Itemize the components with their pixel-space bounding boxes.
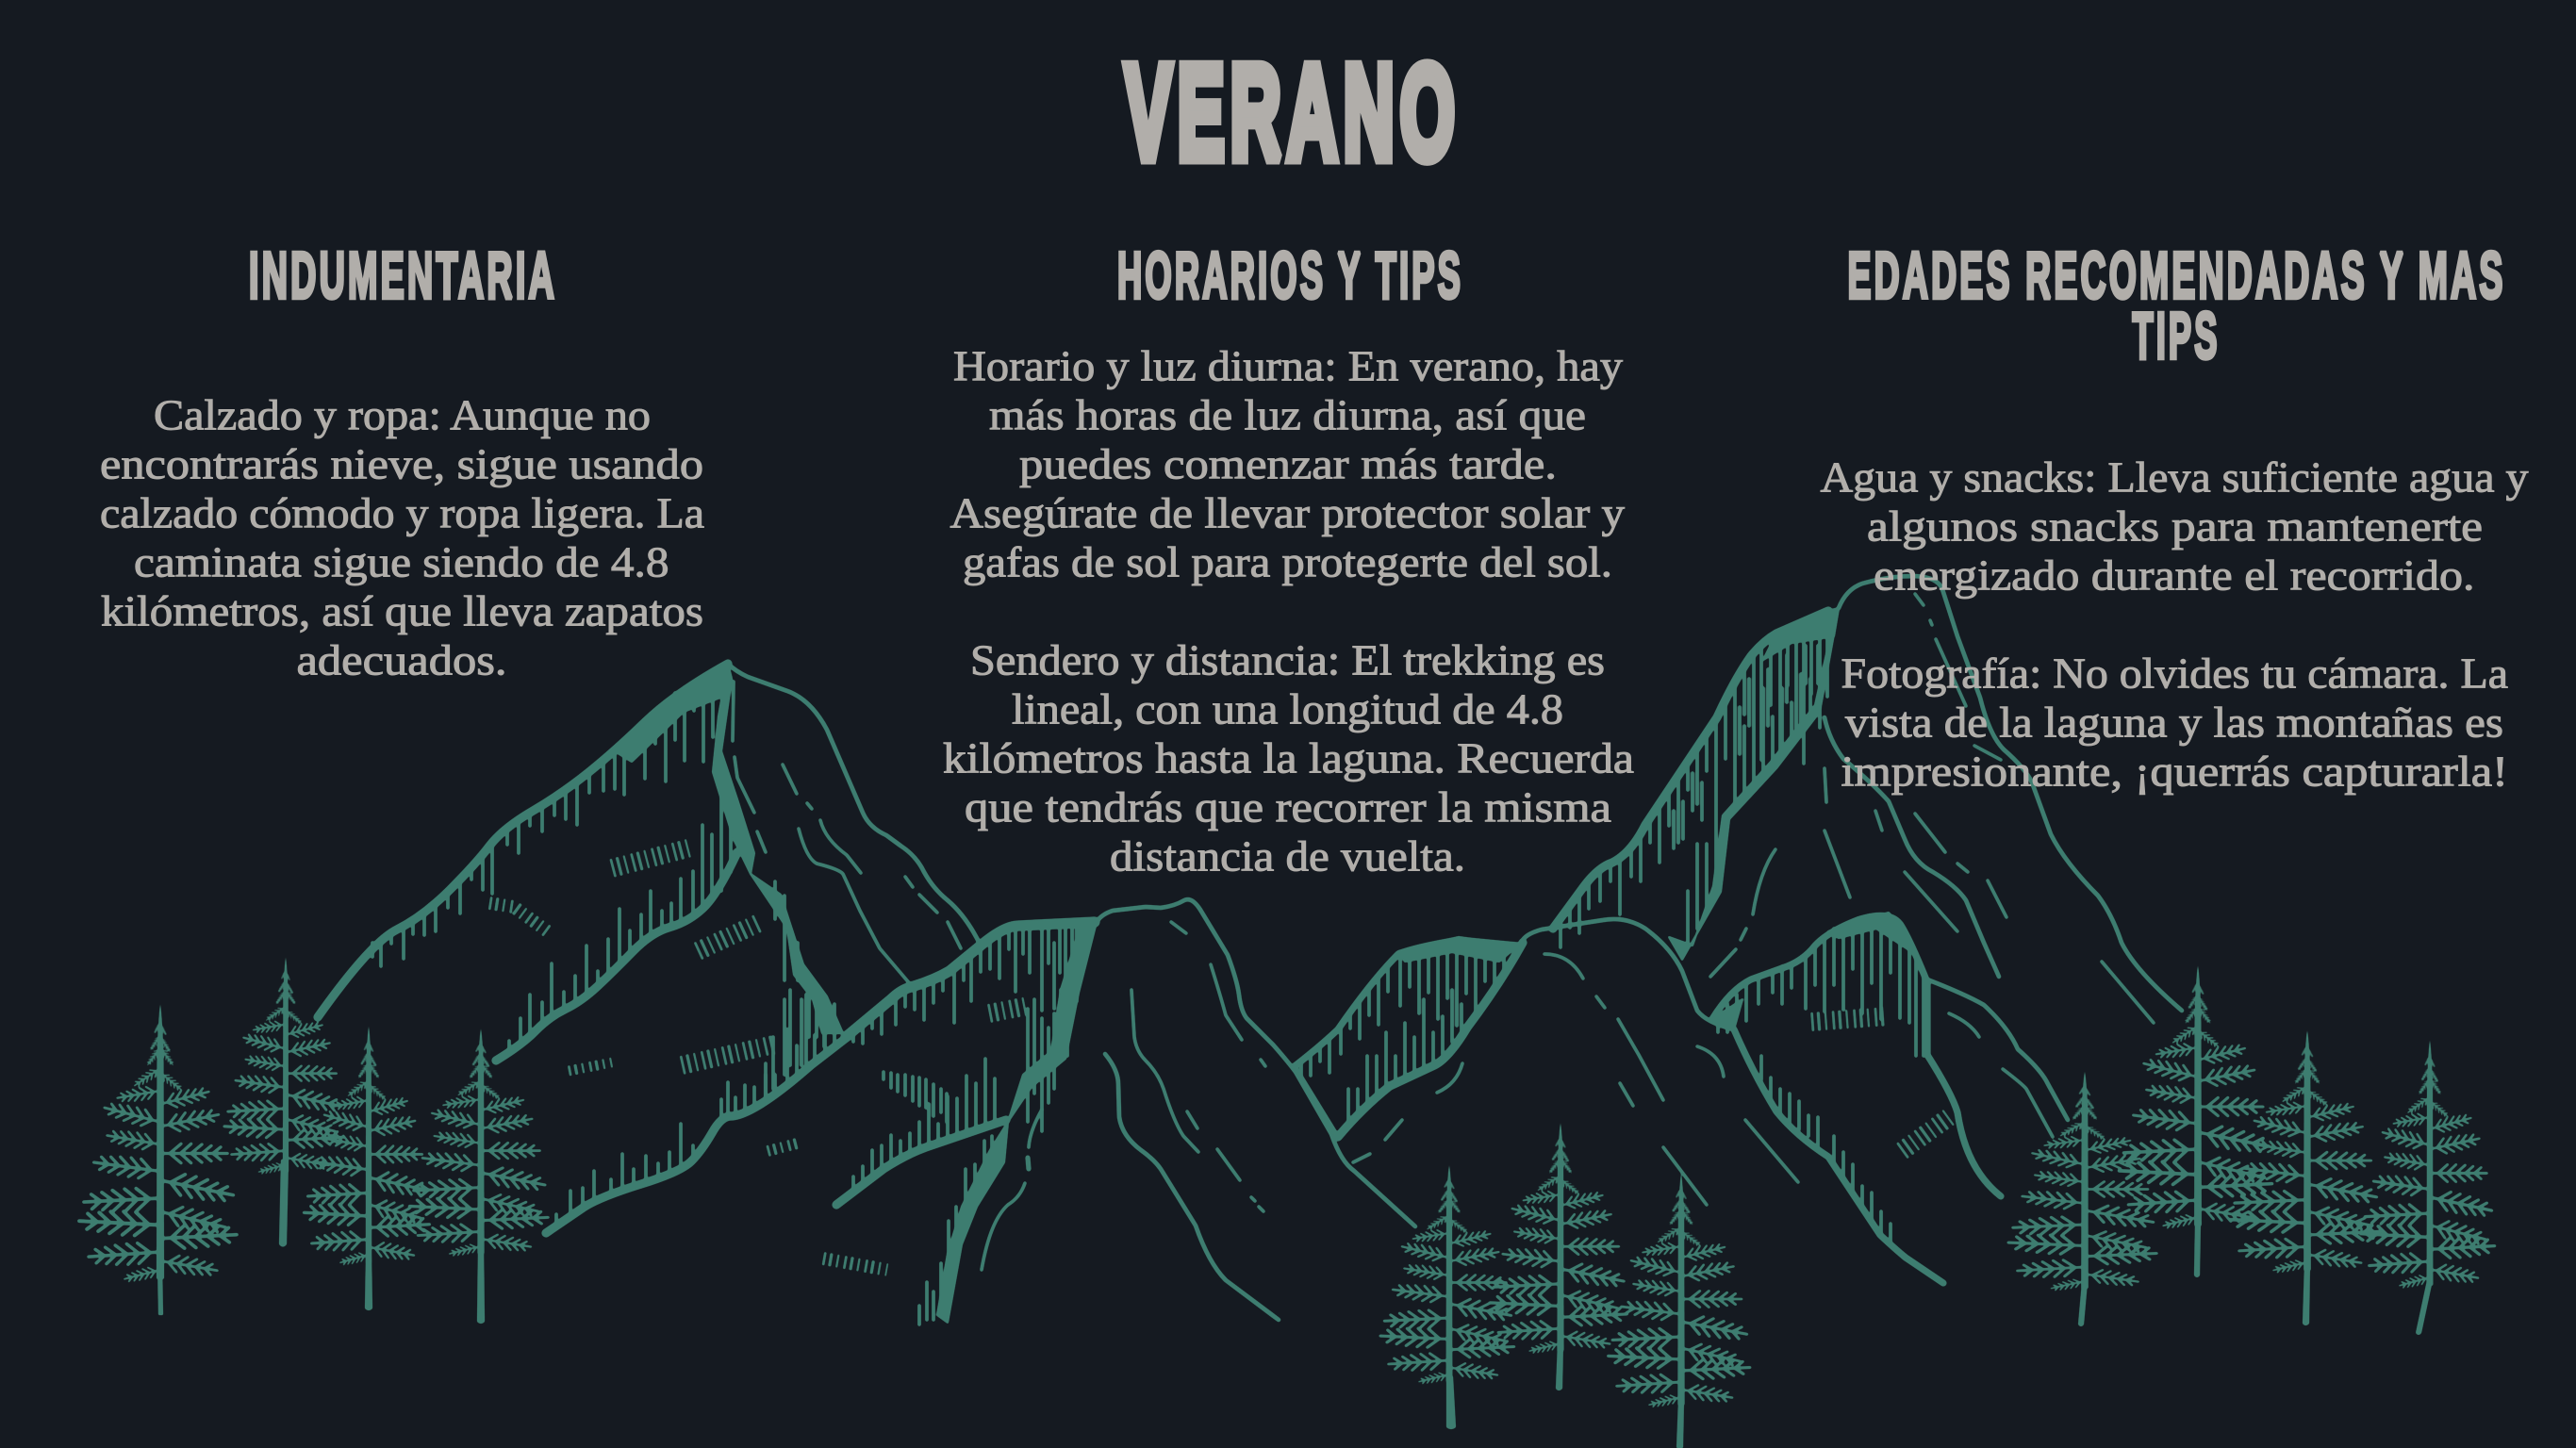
text block: sendero y distancia: distancia de vuelta. (1110, 833, 1465, 880)
pine tree G (2360, 1037, 2495, 1335)
text block: horario y luz diurna (950, 343, 1626, 586)
mountain: right tall peak (1553, 576, 2182, 1023)
text block: fotografía: vista de la laguna y las montañas es (1845, 699, 2503, 747)
text block: horario y luz diurna: Asegúrate de llevar protector solar y (950, 490, 1626, 537)
text block: sendero y distancia: kilómetros hasta la laguna. Recuerda (943, 735, 1634, 782)
text block: fotografía (1841, 650, 2508, 796)
pine tree F (2230, 1028, 2381, 1325)
heading: edades recomendadas y mas tips: TIPS (2133, 299, 2220, 372)
text block: sendero y distancia: lineal, con una longitud de 4.8 (1012, 686, 1563, 733)
heading: horarios y tips: HORARIOS Y TIPS (1117, 239, 1463, 312)
text block: calzado y ropa: Calzado y ropa: Aunque no (154, 392, 651, 439)
text block: calzado y ropa: adecuados. (296, 637, 507, 684)
text block: agua y snacks: algunos snacks para mantenerte (1867, 503, 2483, 551)
text block: horario y luz diurna: más horas de luz diurna, así que (989, 392, 1586, 439)
text block: calzado y ropa (100, 392, 704, 684)
panel: horarios y tips (943, 239, 1634, 880)
text block: fotografía: impresionante, ¡querrás capturarla! (1841, 749, 2508, 796)
pine tree 3 (304, 1023, 430, 1310)
pine tree 2 (223, 954, 344, 1246)
text block: horario y luz diurna: gafas de sol para protegerte del sol. (963, 539, 1612, 586)
mountain: left (318, 664, 981, 1233)
pine tree group: right (2008, 963, 2495, 1335)
pine tree A (1379, 1162, 1514, 1429)
text block: horario y luz diurna: Horario y luz diurna: En verano, hay (953, 343, 1624, 390)
mountain: front center-right head (1295, 919, 1798, 1205)
text block: calzado y ropa: calzado cómodo y ropa ligera. La (100, 490, 704, 537)
text block: agua y snacks (1820, 454, 2529, 600)
pine tree E (2119, 963, 2272, 1277)
pine tree B (1490, 1120, 1627, 1390)
pine tree 1 (78, 1001, 238, 1315)
panel: edades recomendadas y mas tips (1820, 239, 2529, 796)
text block: agua y snacks: energizado durante el recorrido. (1874, 552, 2474, 600)
mountain: center (823, 899, 1415, 1325)
text block: sendero y distancia: que tendrás que recorrer la misma (965, 784, 1611, 831)
pine tree group: left (78, 954, 549, 1324)
pine tree 4 (409, 1026, 549, 1324)
panel: indumentaria (100, 239, 704, 684)
text block: calzado y ropa: kilómetros, así que lleva zapatos (101, 588, 703, 635)
title: VERANO (1125, 38, 1461, 188)
illustration: mountains and pine trees (78, 576, 2495, 1448)
heading: indumentaria: INDUMENTARIA (249, 239, 557, 312)
pine tree D (2008, 1069, 2157, 1326)
text block: calzado y ropa: caminata sigue siendo de 4.8 (134, 539, 669, 586)
text block: horario y luz diurna: puedes comenzar más tarde. (1019, 441, 1557, 488)
text block: sendero y distancia (943, 637, 1634, 880)
text block: calzado y ropa: encontrarás nieve, sigue usando (100, 441, 703, 488)
pine tree C (1608, 1171, 1750, 1448)
heading: edades recomendadas y mas tips (1848, 239, 2506, 372)
text block: fotografía: Fotografía: No olvides tu cámara. La (1841, 650, 2508, 698)
text block: agua y snacks: Agua y snacks: Lleva suficiente agua y (1820, 454, 2529, 502)
mountain: front right small peak (1712, 913, 2068, 1283)
pine tree group: center (1379, 1120, 1750, 1448)
text block: sendero y distancia: Sendero y distancia: El trekking es (970, 637, 1605, 684)
